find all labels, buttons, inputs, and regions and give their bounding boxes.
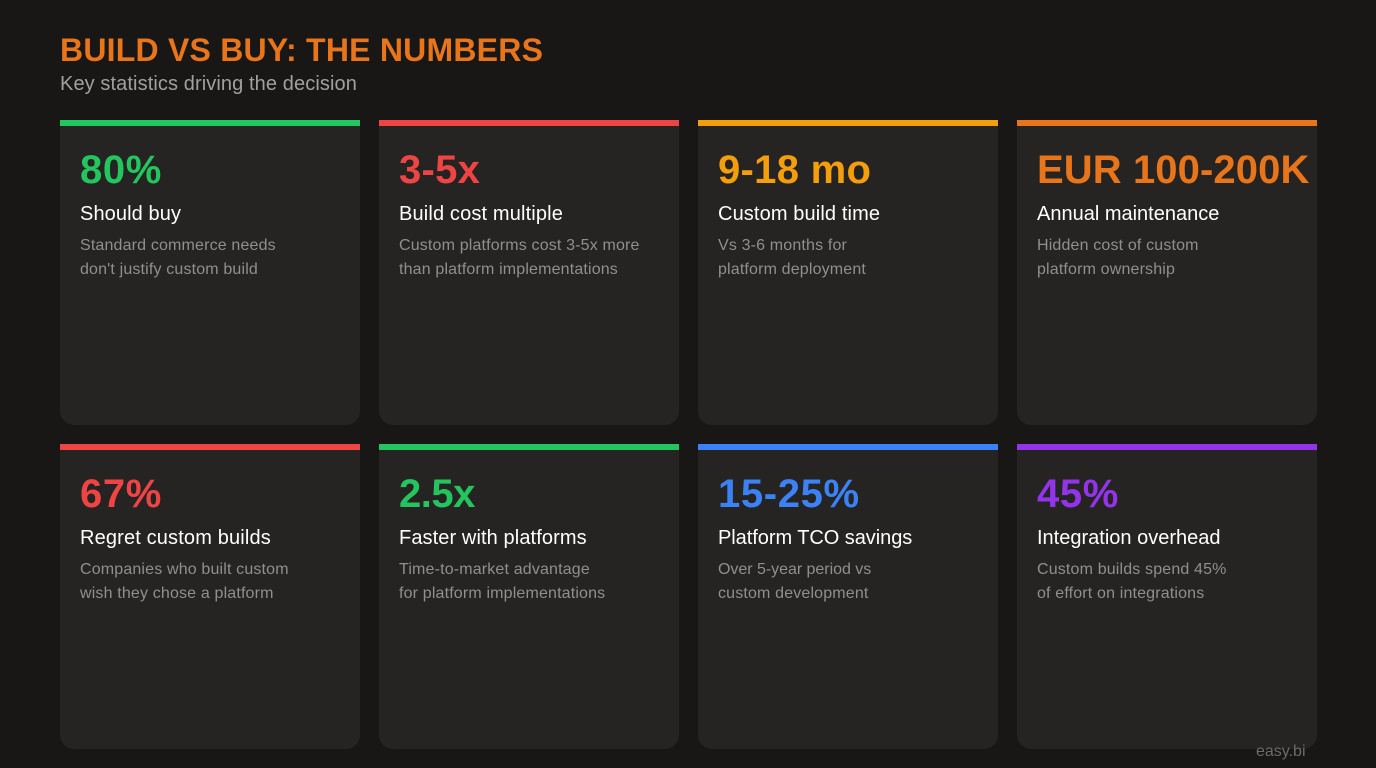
stat description: Custom platforms cost 3-5x more [399,237,640,254]
stat description [399,237,640,278]
stat description [80,237,276,278]
panel: regret custom builds [60,444,360,749]
stat value: 3-5x [399,148,480,192]
panel: should buy [60,120,360,425]
brand footer: easy.bi [1256,743,1306,760]
stat description [1037,561,1227,602]
stat value: 9-18 mo [718,148,871,192]
panel: build cost multiple [379,120,679,425]
stat label: Regret custom builds [80,527,271,549]
stat value: 80% [80,148,162,192]
title: BUILD VS BUY: THE NUMBERS [60,32,543,68]
stat description: Hidden cost of custom [1037,237,1199,254]
stat label: Build cost multiple [399,203,563,225]
stat label: Platform TCO savings [718,527,912,549]
panel: faster with platforms [379,444,679,749]
stat value: 15-25% [718,472,860,516]
panel: annual maintenance [1017,120,1317,425]
stat description: than platform implementations [399,261,618,278]
stat value: 2.5x [399,472,475,516]
stat description: for platform implementations [399,585,605,602]
stat description [1037,237,1199,278]
stat description [718,561,871,602]
stat label: Custom build time [718,203,880,225]
stat label: Integration overhead [1037,527,1220,549]
stat value: 45% [1037,472,1119,516]
stat description: Vs 3-6 months for [718,237,847,254]
panel: integration overhead [1017,444,1317,749]
stat description: custom development [718,585,869,602]
panel: custom build time [698,120,998,425]
stat description [718,237,866,278]
stat description: platform deployment [718,261,866,278]
stat description: Standard commerce needs [80,237,276,254]
stat description: Time-to-market advantage [399,561,590,578]
stat label: Annual maintenance [1037,203,1219,225]
stat description: of effort on integrations [1037,585,1204,602]
subtitle: Key statistics driving the decision [60,73,357,95]
stat description: Over 5-year period vs [718,561,871,578]
stat description: platform ownership [1037,261,1175,278]
stat description: Custom builds spend 45% [1037,561,1227,578]
stat label: Faster with platforms [399,527,587,549]
stat value: EUR 100-200K [1037,148,1309,192]
stat description: Companies who built custom [80,561,289,578]
stat description [80,561,289,602]
panel: platform TCO savings [698,444,998,749]
stat description: wish they chose a platform [80,585,274,602]
stat description: don't justify custom build [80,261,258,278]
stat label: Should buy [80,203,181,225]
stat description [399,561,605,602]
stat value: 67% [80,472,162,516]
